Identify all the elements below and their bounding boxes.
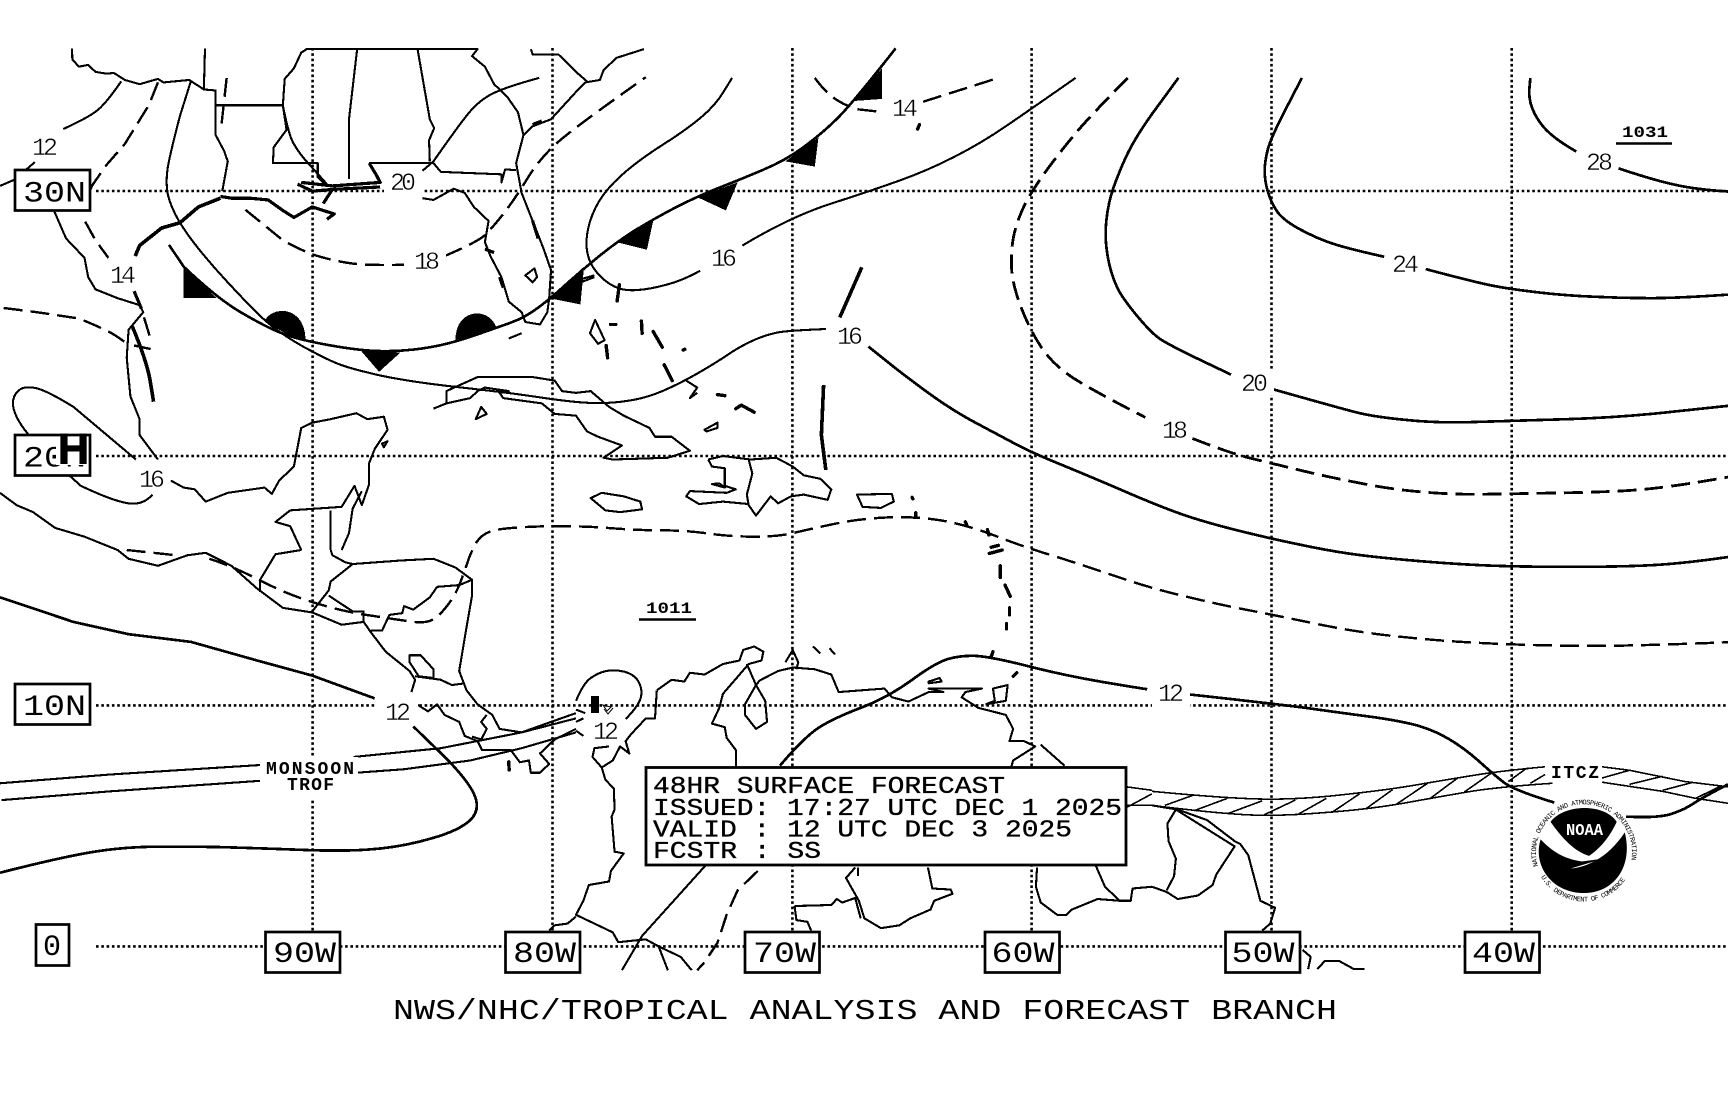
80W: 80W xyxy=(513,938,576,972)
label 12 xyxy=(376,694,418,728)
label 12: 12 xyxy=(1158,680,1184,709)
stationary front with cold and warm symbols xyxy=(169,48,896,372)
monsoon trough label: TROF xyxy=(287,776,334,796)
10N xyxy=(15,684,90,725)
label 20: 20 xyxy=(1241,370,1268,399)
label 12: 12 xyxy=(385,699,411,728)
60W: 60W xyxy=(992,938,1054,972)
ITCZ label xyxy=(1548,758,1602,784)
ITCZ hatched band xyxy=(1126,767,1728,815)
label 14: 14 xyxy=(110,262,136,291)
label 14: 14 xyxy=(892,95,918,124)
icon: NOAA logo: U.S. DEPARTMENT OF COMMERCE xyxy=(1542,874,1626,902)
low pressure value 1011 xyxy=(639,600,696,620)
90W xyxy=(266,932,340,972)
30N xyxy=(15,170,90,212)
line: valid time: VALID : 12 UTC DEC 3 2025 xyxy=(653,818,1072,844)
thick trough axes xyxy=(132,267,862,470)
high pressure symbol: H xyxy=(58,426,89,474)
20N: 20N xyxy=(23,442,86,476)
monsoon trough xyxy=(0,718,576,800)
label 24: 24 xyxy=(1392,251,1419,280)
10N: 10N xyxy=(23,691,86,725)
80W xyxy=(506,932,580,972)
0: 0 xyxy=(43,931,61,965)
icon: NOAA logo: NATIONAL OCEANIC AND ATMOSPHERIC ADMINISTRATION xyxy=(1531,800,1637,867)
label 12 xyxy=(1152,680,1190,712)
latitude labels xyxy=(15,170,90,966)
label 12: 12 xyxy=(32,134,58,163)
label 20: 20 xyxy=(390,169,416,198)
label 16: 16 xyxy=(711,245,737,274)
70W xyxy=(745,932,820,972)
high pressure value 1031: 1031 xyxy=(1622,124,1668,142)
high pressure value 1031 xyxy=(1616,124,1672,144)
70W: 70W xyxy=(753,938,816,972)
monsoon trough label: MONSOON xyxy=(266,760,354,780)
footer credit: NWS/NHC/TROPICAL ANALYSIS AND FORECAST BRANCH xyxy=(393,995,1337,1028)
coastlines and borders xyxy=(0,48,1364,970)
low pressure symbol xyxy=(591,696,613,714)
label 16 xyxy=(705,245,743,274)
label 18: 18 xyxy=(414,248,440,277)
50W: 50W xyxy=(1232,938,1294,972)
forecast info box xyxy=(646,768,1126,866)
40W xyxy=(1465,932,1540,972)
60W xyxy=(985,932,1060,972)
icon: NOAA logo: NOAA xyxy=(1566,822,1604,841)
label 18 xyxy=(408,248,446,277)
30N: 30N xyxy=(23,178,86,212)
label 28: 28 xyxy=(1586,149,1613,178)
label 12: 12 xyxy=(593,718,619,747)
label 16: 16 xyxy=(139,466,165,495)
longitude labels xyxy=(266,932,1540,972)
20N xyxy=(15,435,90,476)
40W: 40W xyxy=(1472,938,1535,972)
label 18: 18 xyxy=(1162,417,1188,446)
low pressure value 1011: 1011 xyxy=(646,600,692,618)
label 20 xyxy=(384,169,422,198)
line: product title: 48HR SURFACE FORECAST xyxy=(653,774,1005,801)
contour labels xyxy=(32,95,1613,747)
icon: NOAA logo xyxy=(1531,800,1637,902)
0 xyxy=(36,924,69,966)
90W: 90W xyxy=(273,938,336,972)
ITCZ label: ITCZ xyxy=(1551,764,1599,784)
monsoon trough label xyxy=(262,757,358,799)
label 16: 16 xyxy=(837,323,863,352)
line: issued time: ISSUED: 17:27 UTC DEC 1 2025 xyxy=(653,796,1122,823)
line: forecaster: FCSTR : SS xyxy=(653,839,821,866)
50W xyxy=(1226,932,1300,972)
